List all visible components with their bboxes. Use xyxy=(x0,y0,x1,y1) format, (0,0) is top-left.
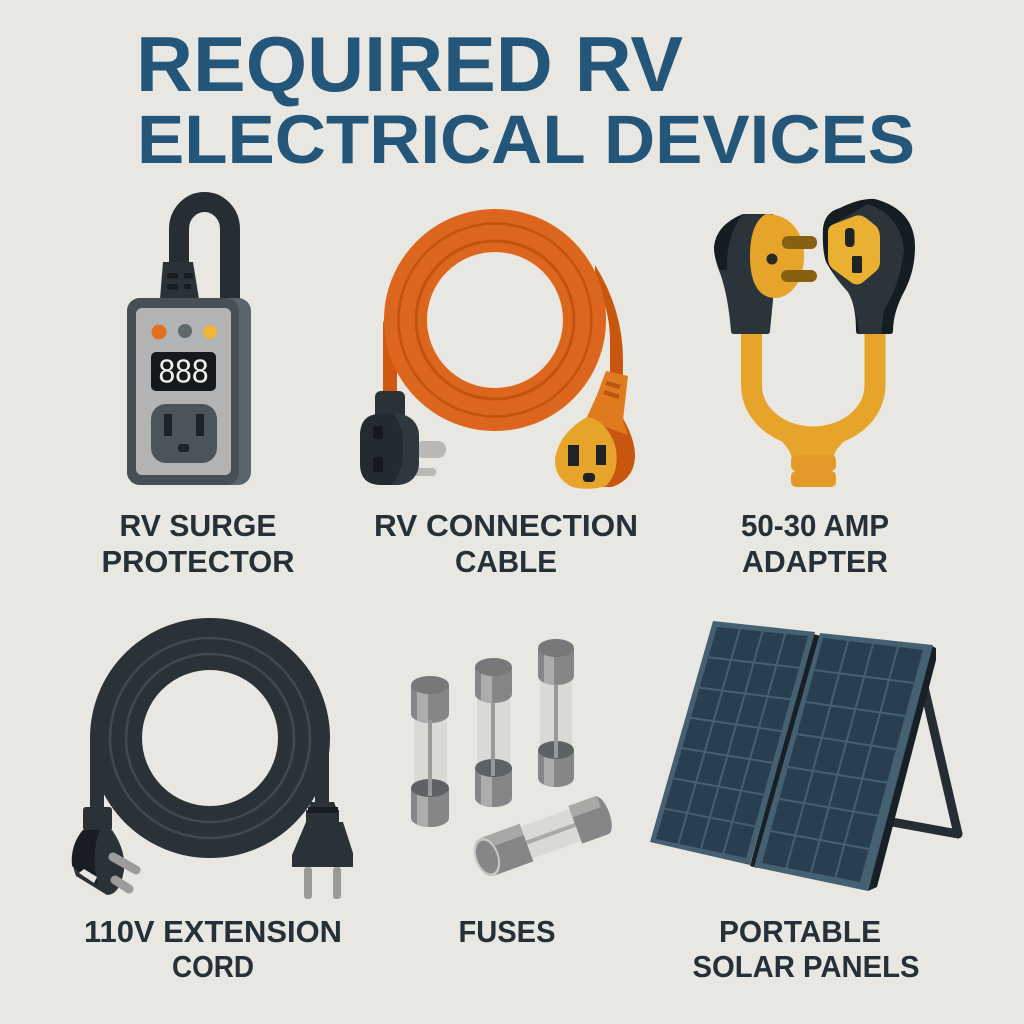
fuse 4 xyxy=(469,794,616,880)
label: fuses: FUSES xyxy=(458,914,556,949)
label: portable solar panels: SOLAR PANELS xyxy=(692,949,920,984)
label: 110V extension cord xyxy=(84,914,342,984)
label: portable solar panels xyxy=(692,914,920,984)
label: RV connection cable xyxy=(374,508,638,579)
label: RV surge protector: PROTECTOR xyxy=(102,544,294,579)
label: RV connection cable: RV CONNECTION xyxy=(374,508,638,543)
fuse 3 xyxy=(538,639,574,787)
label: 110V extension cord: 110V EXTENSION xyxy=(84,914,342,949)
icon: 50-30 amp adapter xyxy=(714,199,915,487)
title: REQUIRED RV xyxy=(136,20,683,108)
title: ELECTRICAL DEVICES xyxy=(137,101,915,178)
label: 50-30 amp adapter xyxy=(741,508,889,579)
icon: RV connection cable xyxy=(360,224,635,489)
icon: 110V extension cord xyxy=(72,638,353,899)
icon: portable solar panels xyxy=(650,621,958,891)
title xyxy=(136,20,915,178)
label: RV surge protector: RV SURGE xyxy=(120,508,276,543)
label: portable solar panels: PORTABLE xyxy=(719,914,881,949)
label: RV connection cable: CABLE xyxy=(455,544,557,579)
fuse 1 xyxy=(411,676,449,827)
label: 50-30 amp adapter: ADAPTER xyxy=(742,544,888,579)
label: RV surge protector xyxy=(102,508,294,579)
label: 50-30 amp adapter: 50-30 AMP xyxy=(741,508,889,543)
fuse 2 xyxy=(475,658,512,807)
icon: fuses xyxy=(411,639,616,880)
right panel xyxy=(754,633,933,891)
label: 110V extension cord: CORD xyxy=(172,949,254,984)
icon: RV surge protector xyxy=(127,202,251,485)
icon: RV surge protector: 888 xyxy=(158,352,208,390)
left panel xyxy=(650,621,815,865)
